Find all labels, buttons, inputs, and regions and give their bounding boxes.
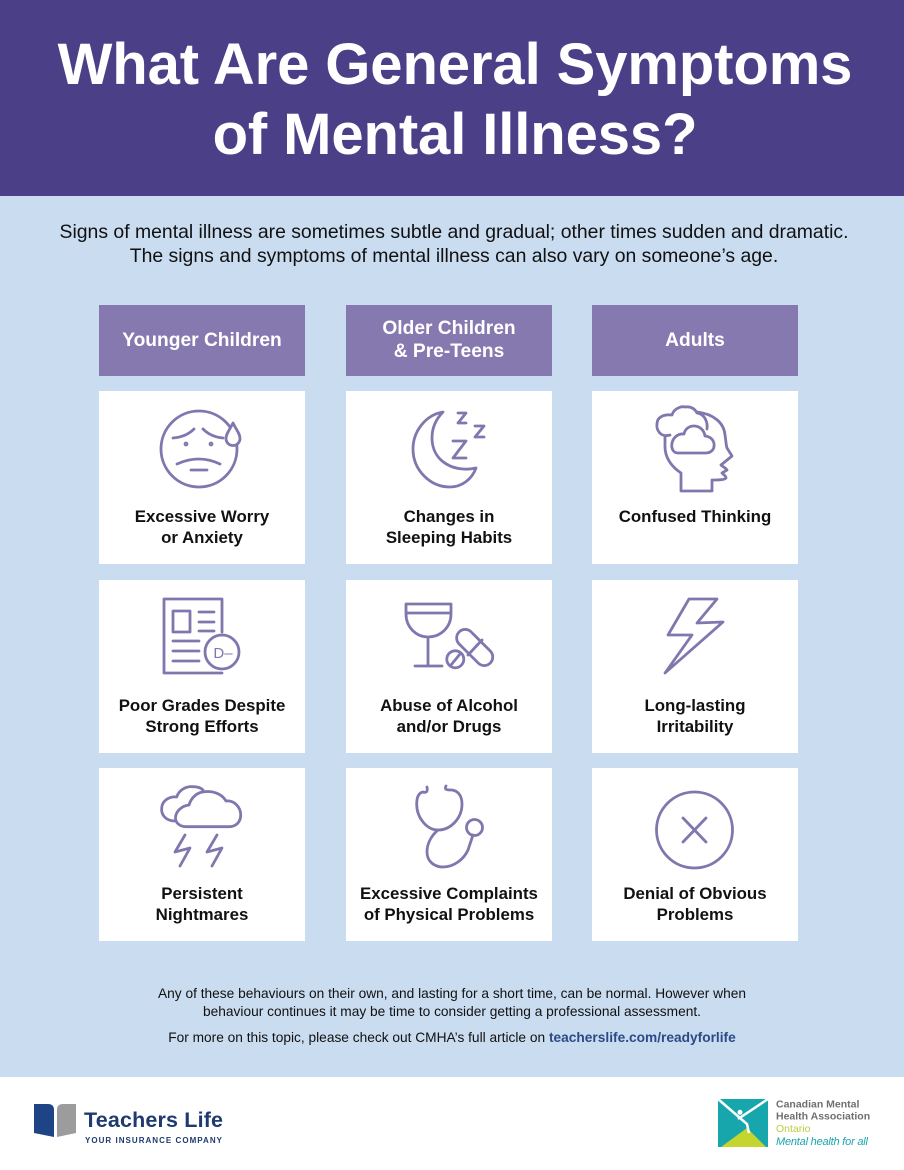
label: Excessive Worry	[135, 507, 269, 526]
title banner	[0, 0, 904, 196]
label	[135, 507, 270, 546]
footer band	[0, 1077, 904, 1170]
logo: teachers life	[34, 1104, 223, 1145]
closing note: behaviour continues it may be time to consider getting a professional assessment.	[203, 1004, 701, 1019]
label: Excessive Complaints	[360, 884, 538, 903]
icon: wine glass and pills	[404, 602, 494, 670]
column heading: older children and pre-teens: Older Children	[382, 318, 516, 339]
icon: crescent moon with z letters	[412, 410, 486, 488]
logo: canadian mental health association ontario: Canadian Mental	[776, 1098, 860, 1110]
column heading: younger children: Younger Children	[122, 330, 282, 350]
logo: canadian mental health association ontario: Ontario	[776, 1123, 811, 1135]
column heading: older children and pre-teens: & Pre-Teens	[394, 341, 504, 362]
column heading: adults	[592, 304, 798, 376]
panel: long-lasting irritability	[592, 580, 798, 753]
icon: report card with grade	[162, 598, 240, 674]
icon: worried face with sweat drop	[160, 410, 242, 488]
label: Denial of Obvious	[623, 884, 767, 903]
icon: stethoscope	[415, 784, 484, 868]
label	[386, 507, 512, 546]
label	[644, 696, 746, 736]
icon: storm clouds with lightning	[160, 785, 242, 868]
label	[119, 696, 285, 736]
icon: report card with grade: D–	[213, 645, 233, 662]
title	[58, 32, 852, 167]
label: Persistent	[161, 884, 243, 903]
closing note: Any of these behaviours on their own, and lasting for a short time, can be normal. However when	[158, 986, 746, 1001]
panel: excessive worry or anxiety	[99, 391, 305, 564]
label: and/or Drugs	[397, 716, 501, 736]
panel: poor grades despite strong efforts	[99, 580, 305, 753]
icon: lightning bolt	[664, 598, 724, 674]
label: Sleeping Habits	[386, 528, 512, 546]
panel: confused thinking	[592, 391, 798, 564]
logo: teachers life: YOUR INSURANCE COMPANY	[85, 1136, 223, 1145]
column heading: older children and pre-teens	[346, 304, 552, 376]
label: Changes in	[404, 507, 494, 526]
icon: head with clouds	[656, 405, 734, 492]
label: Strong Efforts	[145, 716, 259, 736]
title: What Are General Symptoms	[58, 32, 852, 97]
label: Poor Grades Despite	[119, 696, 285, 715]
closing note	[158, 986, 746, 1019]
label: Long-lasting	[644, 696, 746, 715]
label	[380, 696, 518, 736]
label: Nightmares	[156, 904, 248, 924]
label: Abuse of Alcohol	[380, 696, 518, 715]
logo: canadian mental health association ontario: Health Association	[776, 1110, 870, 1122]
intro text	[60, 221, 848, 267]
intro text: The signs and symptoms of mental illness can also vary on someone’s age.	[130, 245, 778, 267]
label	[360, 884, 538, 924]
logo: teachers life: Teachers Life	[84, 1108, 223, 1132]
label: Irritability	[657, 716, 733, 736]
logo: canadian mental health association ontario	[718, 1098, 870, 1148]
label	[623, 884, 767, 924]
intro text: Signs of mental illness are sometimes subtle and gradual; other times sudden and dramatic.	[60, 221, 848, 243]
icon: circled x	[655, 790, 734, 870]
panel: persistent nightmares	[99, 768, 305, 941]
column heading: adults: Adults	[665, 330, 725, 350]
panel: denial of obvious problems	[592, 768, 798, 941]
label: Confused Thinking	[619, 507, 771, 526]
label	[156, 884, 248, 924]
column heading: younger children	[99, 304, 305, 376]
panel: changes in sleeping habits	[346, 391, 552, 564]
article link: For more on this topic, please check out CMHA’s full article on teacherslife.com/readyforlife	[168, 1030, 736, 1045]
panel: abuse of alcohol and/or drugs	[346, 580, 552, 753]
label: or Anxiety	[161, 528, 243, 546]
panel: excessive complaints of physical problems	[346, 768, 552, 941]
title: of Mental Illness?	[213, 102, 697, 167]
logo: canadian mental health association ontario: Mental health for all	[776, 1136, 869, 1148]
label: Problems	[657, 904, 733, 924]
label: of Physical Problems	[364, 904, 534, 924]
